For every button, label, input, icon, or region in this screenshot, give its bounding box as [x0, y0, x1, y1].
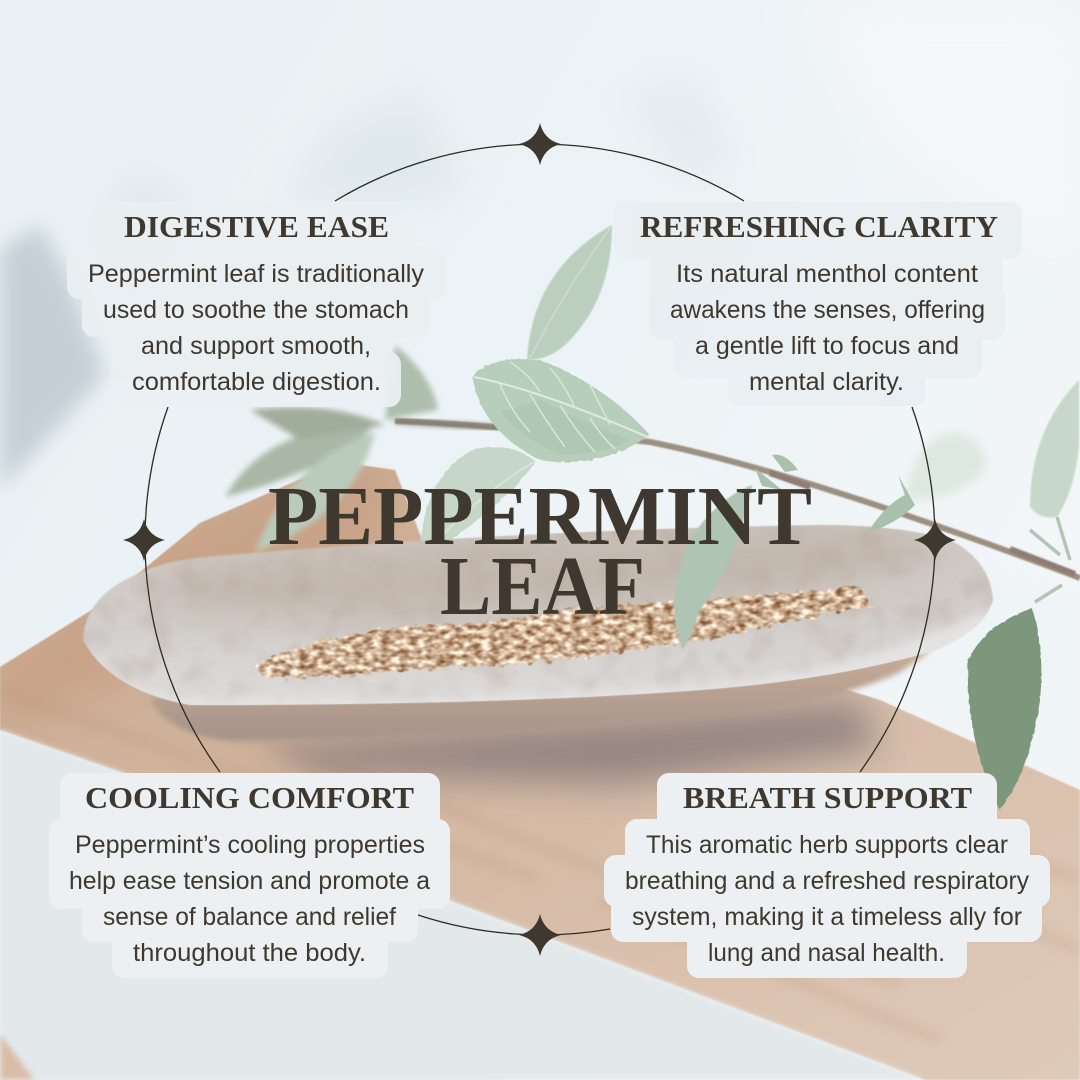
main title: LEAF [440, 540, 645, 633]
body text: help ease tension and promote a [69, 867, 430, 895]
body text: comfortable digestion. [132, 368, 381, 396]
icon: star top [519, 123, 561, 165]
panel: breath support [604, 773, 1050, 978]
icon: star bottom [519, 914, 561, 956]
panel: digestive ease [67, 202, 445, 407]
dish [80, 520, 1000, 741]
small leaves on the stem [755, 455, 915, 532]
circle arcs with stars [123, 123, 956, 956]
body text: lung and nasal health. [708, 939, 945, 967]
body text: mental clarity. [749, 368, 904, 396]
body text: breathing and a refreshed respiratory [625, 867, 1029, 895]
body text: awakens the senses, offering [670, 296, 985, 324]
body text: throughout the body. [133, 939, 366, 967]
heading: COOLING COMFORT [85, 780, 414, 815]
stem [395, 421, 1080, 578]
body text: system, making it a timeless ally for [632, 903, 1022, 931]
heading: BREATH SUPPORT [683, 780, 972, 815]
right upper leaf [1030, 380, 1079, 602]
heading: REFRESHING CLARITY [640, 209, 998, 244]
heading: DIGESTIVE EASE [124, 209, 389, 244]
main title: PEPPERMINT [268, 470, 812, 563]
panel: cooling comfort [49, 773, 450, 978]
body text [88, 260, 424, 396]
wooden board [0, 462, 1080, 1080]
main title [268, 470, 812, 633]
blurred back leaves [225, 345, 438, 552]
icon: star left [123, 519, 165, 561]
body text [69, 831, 430, 967]
body text: This aromatic herb supports clear [646, 831, 1008, 859]
right large leaf [968, 608, 1041, 810]
main leaf [472, 359, 650, 462]
body text [625, 831, 1029, 967]
body text: Peppermint leaf is traditionally [88, 260, 424, 288]
lower left leaf [420, 447, 536, 560]
body text: and support smooth, [141, 332, 371, 360]
icon: star right [914, 519, 956, 561]
front leaf in dish [674, 485, 752, 650]
body text: used to soothe the stomach [103, 296, 409, 324]
body text: a gentle lift to focus and [695, 332, 959, 360]
body text: Its natural menthol content [676, 260, 978, 288]
marble surface [0, 730, 925, 1080]
panel: refreshing clarity [614, 202, 1022, 406]
body text: Peppermint’s cooling properties [75, 831, 425, 859]
body text: sense of balance and relief [103, 903, 396, 931]
top leaf [527, 225, 612, 360]
herb pile [255, 588, 872, 677]
body text [670, 260, 985, 396]
